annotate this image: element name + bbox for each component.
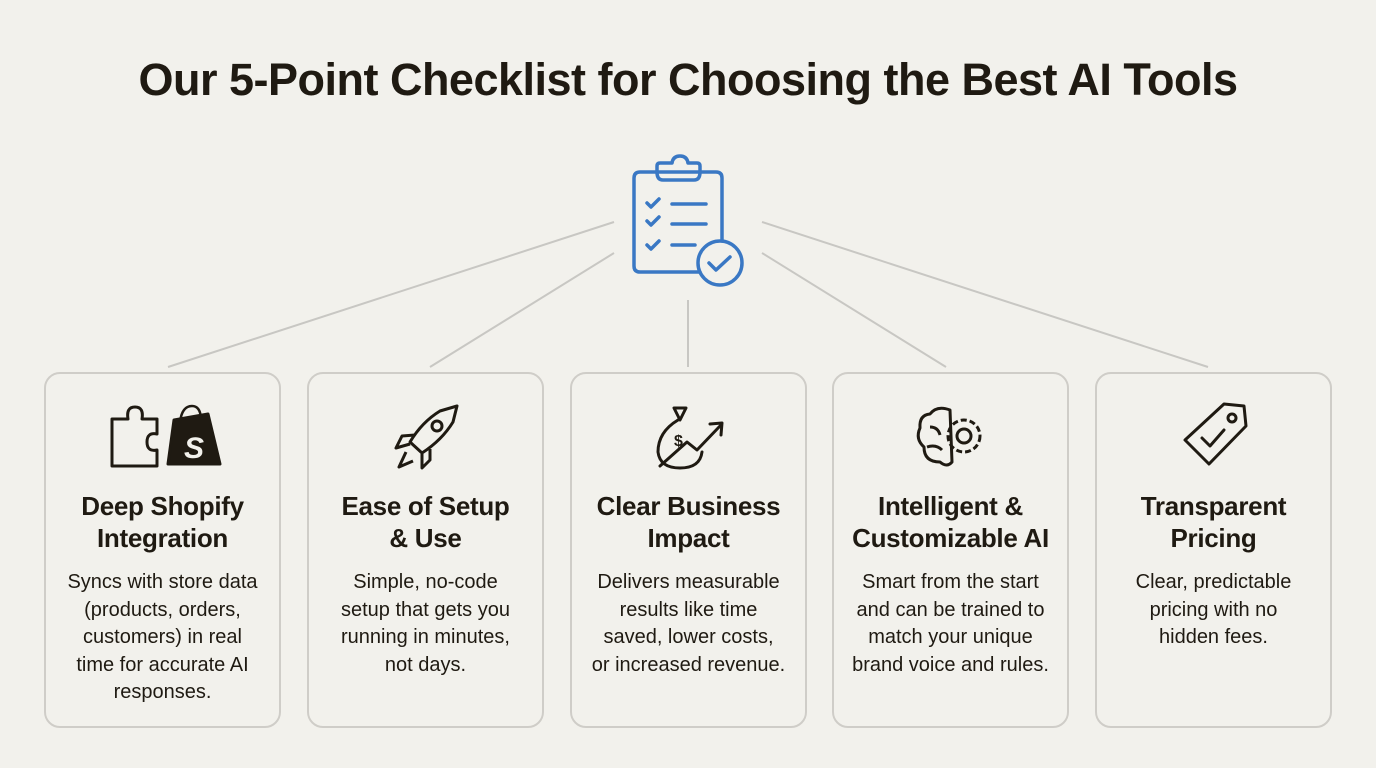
- connector lines: [168, 221, 1208, 368]
- card 2: [307, 372, 544, 728]
- icon: brain + gear: [916, 406, 982, 466]
- card 3: Delivers measurable: [597, 571, 780, 593]
- card 4: Customizable AI: [852, 523, 1049, 553]
- card 1: customers) in real: [83, 626, 242, 648]
- title: Our 5-Point Checklist for Choosing the Best AI Tools: [138, 54, 1238, 105]
- card 3: or increased revenue.: [592, 654, 785, 676]
- card 3: Clear Business: [597, 491, 780, 521]
- icon: rocket: [394, 404, 458, 470]
- card 4: match your unique: [868, 626, 1033, 648]
- card 3: Impact: [647, 523, 730, 553]
- card 4: [832, 372, 1069, 728]
- card 3: [570, 372, 807, 728]
- card 2: running in minutes,: [341, 626, 510, 648]
- card 5: [1095, 372, 1332, 728]
- card 3: saved, lower costs,: [603, 626, 774, 648]
- card 5: Pricing: [1170, 523, 1257, 553]
- card 1: Integration: [97, 523, 228, 553]
- card 2: Simple, no-code: [353, 571, 498, 593]
- card 4: Smart from the start: [862, 571, 1039, 593]
- card 4: and can be trained to: [857, 598, 1044, 620]
- card 1: Syncs with store data: [67, 571, 258, 593]
- card 5: pricing with no: [1150, 598, 1277, 620]
- card 2: setup that gets you: [341, 598, 510, 620]
- icon: clipboard hub: [632, 154, 744, 287]
- card 5: Transparent: [1141, 491, 1286, 521]
- card 5: hidden fees.: [1159, 626, 1268, 648]
- card 2: not days.: [385, 654, 466, 676]
- card 1: Deep Shopify: [81, 491, 244, 521]
- icon: money bag growth: [656, 406, 724, 470]
- icon: price tag check: [1183, 402, 1248, 466]
- card 4: Intelligent &: [878, 491, 1023, 521]
- card 1: (products, orders,: [84, 598, 241, 620]
- card 1: [44, 372, 281, 728]
- card 1: time for accurate AI: [76, 654, 249, 676]
- card 2: & Use: [389, 523, 462, 553]
- icon: puzzle + shopify bag: [110, 404, 222, 468]
- card 3: results like time: [620, 598, 757, 620]
- card 5: Clear, predictable: [1136, 571, 1291, 593]
- icon: money bag growth: $: [674, 433, 683, 450]
- card 1: responses.: [114, 681, 211, 703]
- card 4: brand voice and rules.: [852, 654, 1049, 676]
- icon: puzzle + shopify bag: S: [184, 432, 204, 465]
- card 2: Ease of Setup: [341, 491, 510, 521]
